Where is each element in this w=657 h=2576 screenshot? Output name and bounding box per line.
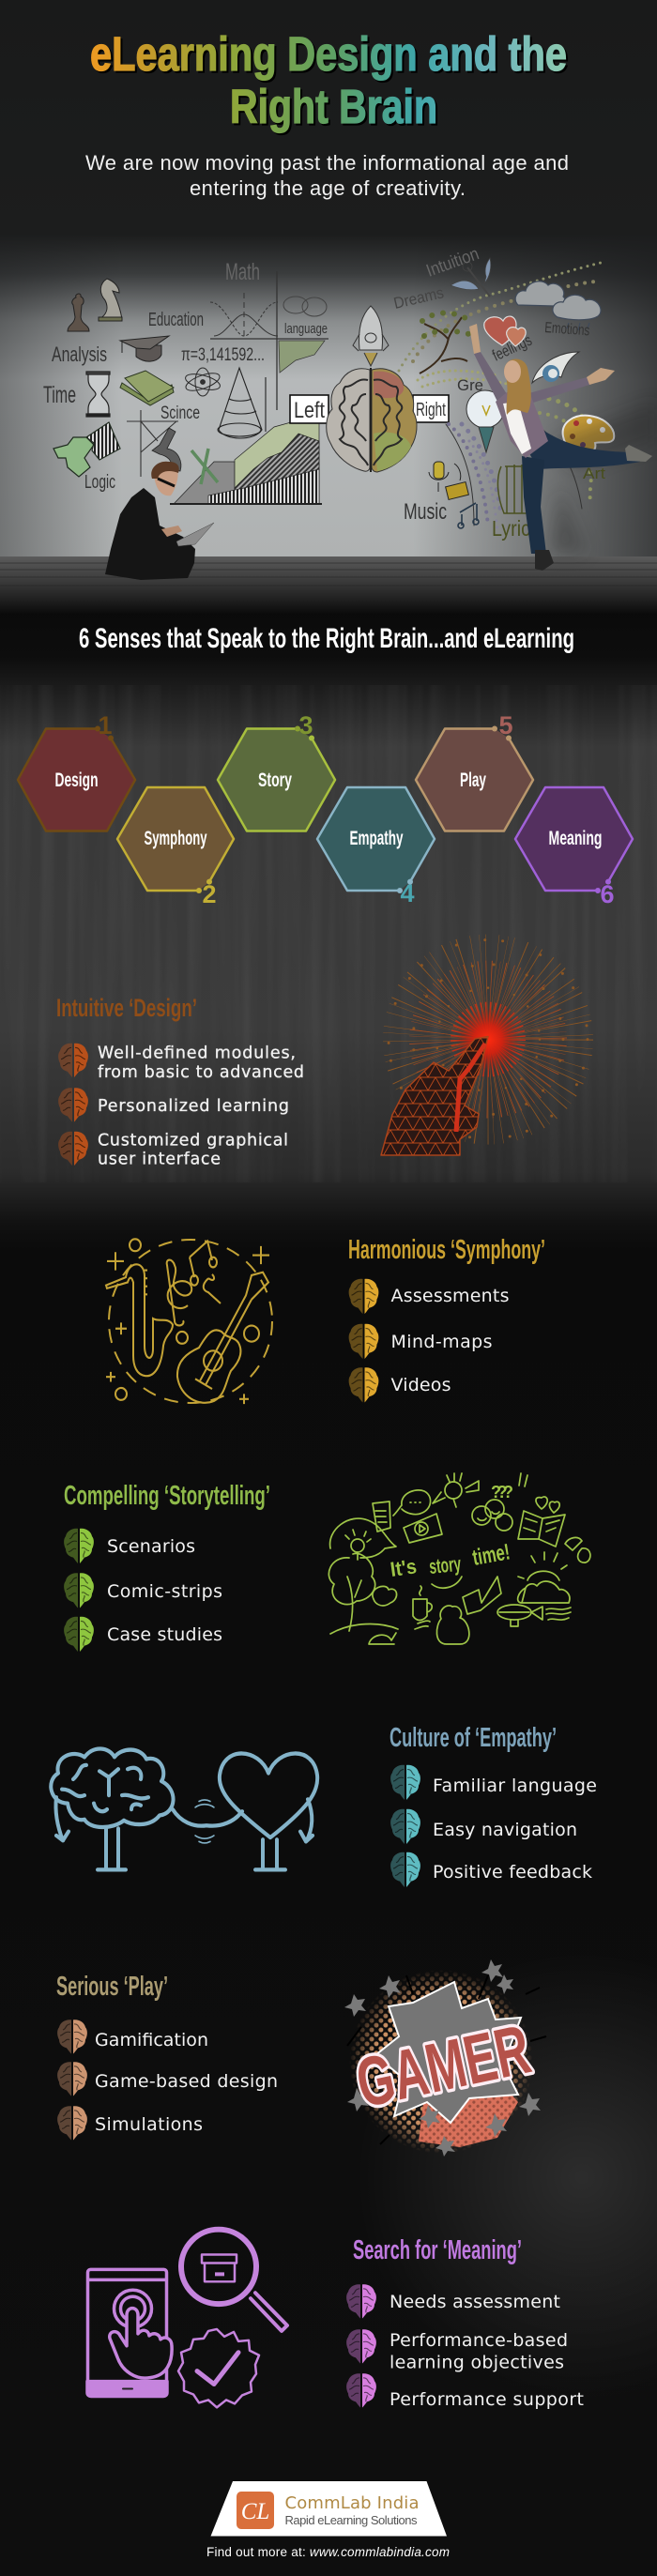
bullet list: Familiar language xyxy=(433,1776,597,1796)
hexagon: meaning: Meaning xyxy=(548,828,603,849)
wall shadow xyxy=(549,402,657,554)
head xyxy=(151,462,179,495)
sketch: labels left: Math xyxy=(225,259,260,285)
bullet list: Game-based design xyxy=(95,2071,278,2092)
bullet list xyxy=(57,2020,278,2140)
sketch: brain xyxy=(327,368,417,472)
sketch: tree xyxy=(420,312,469,373)
sketch: labels left xyxy=(43,259,328,493)
sketch: labels left: language xyxy=(284,321,328,337)
bullet list: Simulations xyxy=(95,2114,203,2135)
sketch: eye xyxy=(532,352,579,383)
heading: Serious ‘Play’ xyxy=(56,1972,168,2002)
sketch: right-side labels: Lyric xyxy=(492,516,530,541)
sketch: right-side labels: Emotions xyxy=(544,320,590,339)
icon: gamer badge xyxy=(344,1959,546,2157)
hexagon: symphony xyxy=(117,787,234,908)
bullet list xyxy=(64,1529,222,1652)
hexagon: meaning xyxy=(515,787,633,908)
man with laptop xyxy=(105,462,214,580)
sketch: geometry and microscope xyxy=(127,410,181,477)
hands xyxy=(469,324,615,385)
panel: search for meaning xyxy=(87,2230,584,2410)
hexagon: meaning: 6 xyxy=(600,880,615,908)
sketch: books xyxy=(120,371,174,405)
sketch: microphone and radio xyxy=(429,462,468,499)
standing leg xyxy=(522,456,546,554)
face xyxy=(504,360,521,383)
heading: Compelling ‘Storytelling’ xyxy=(64,1481,270,1511)
footer logo xyxy=(210,2481,447,2536)
bullet list: Mind-maps xyxy=(390,1332,492,1352)
title: Right Brain xyxy=(230,80,437,133)
heading: Culture of ‘Empathy’ xyxy=(390,1723,557,1753)
sketch: harp xyxy=(497,465,531,513)
hexagon: design xyxy=(18,711,135,831)
bullet list: Gamification xyxy=(95,2030,208,2050)
hexagon: design: Design xyxy=(54,770,98,791)
hair xyxy=(504,359,531,415)
sketch: hourglass xyxy=(86,372,110,417)
hexagon: symphony: 2 xyxy=(202,880,217,908)
panel: culture of empathy xyxy=(51,1723,597,1887)
icon: story time doodles: ??? xyxy=(491,1483,513,1501)
raised leg xyxy=(527,430,640,469)
icon: story time doodles: story xyxy=(428,1552,463,1578)
bullet list xyxy=(58,1044,304,1169)
title xyxy=(90,27,567,133)
bullet list: from basic to advanced xyxy=(98,1063,304,1082)
bullet list: Well-defined modules, xyxy=(98,1044,296,1062)
icon: story time doodles: time! xyxy=(470,1539,512,1571)
sketch: atom xyxy=(184,368,222,396)
lower right glow xyxy=(357,1952,657,2402)
panel: intuitive design xyxy=(56,940,588,1169)
chalkboard texture xyxy=(0,685,657,1182)
sketch: right-side labels: Intuition xyxy=(424,244,481,282)
icon: story time doodles xyxy=(328,1473,590,1644)
sketch: key with wings xyxy=(451,258,491,297)
sketch: language bubbles xyxy=(283,297,327,316)
bullet list: Comic-strips xyxy=(107,1581,222,1602)
brand name: CommLab India xyxy=(285,2493,419,2513)
laptop xyxy=(176,523,214,546)
sketch: area graph xyxy=(170,422,322,504)
woman dancing xyxy=(469,324,657,571)
hexagon: empathy: 4 xyxy=(400,879,415,907)
sketch: right-side labels: feelings xyxy=(490,331,535,365)
sketch: palette xyxy=(563,416,614,452)
hexagon: story xyxy=(218,711,335,831)
tee xyxy=(503,402,531,454)
hexagon: story: 3 xyxy=(298,711,313,739)
footer link: Find out more at: www.commlabindia.com xyxy=(206,2545,450,2559)
bullet list xyxy=(349,1279,509,1402)
bullet list: learning objectives xyxy=(390,2352,564,2372)
bullet list: Performance-based xyxy=(390,2330,568,2351)
sketch: cone xyxy=(218,368,266,438)
icon: story time doodles: It's xyxy=(389,1554,418,1581)
hexagon: story: Story xyxy=(258,770,292,791)
sketch: rocket xyxy=(353,306,389,366)
bullet list: user interface xyxy=(98,1151,221,1169)
hero photo: left and right brain wall xyxy=(0,235,657,615)
sketch: graduation cap xyxy=(120,336,169,361)
icon: musical instruments xyxy=(106,1239,272,1404)
bullet list: Performance support xyxy=(390,2389,584,2410)
subtitle: We are now moving past the informational age and xyxy=(85,151,569,175)
arms xyxy=(474,352,589,404)
sketch: clouds xyxy=(515,282,601,330)
logo mark: CL xyxy=(241,2499,269,2524)
boot xyxy=(535,550,554,571)
hand xyxy=(161,526,182,537)
sketch: labels left: Time xyxy=(43,382,76,408)
icon: tablet, magnifier and badge xyxy=(87,2230,287,2407)
shirt xyxy=(496,392,548,458)
floor xyxy=(0,556,657,615)
sketch: right label: Right xyxy=(416,400,446,420)
sketch: labels left: Analysis xyxy=(52,343,107,366)
bullet list: Scenarios xyxy=(107,1536,195,1557)
bullet list: Videos xyxy=(390,1375,451,1395)
tagline: Rapid eLearning Solutions xyxy=(285,2513,418,2527)
sketch: labels left: Scince xyxy=(160,404,200,423)
heading: Search for ‘Meaning’ xyxy=(353,2235,522,2265)
bullet list: Needs assessment xyxy=(390,2292,560,2312)
hexagon: empathy xyxy=(317,787,435,907)
hexagon: play: Play xyxy=(460,770,486,791)
sketch: math axes xyxy=(210,271,328,410)
man body xyxy=(105,488,195,580)
sketch: puzzle xyxy=(53,422,120,477)
heading: Intuitive ‘Design’ xyxy=(56,994,197,1022)
sketch: light bulb xyxy=(466,390,504,452)
bullet list xyxy=(390,1765,597,1887)
panel: compelling storytelling xyxy=(64,1473,590,1652)
bullet list xyxy=(346,2284,584,2410)
hexagon: design: 1 xyxy=(98,711,113,739)
sketch: small chart xyxy=(279,341,325,373)
hexagon: symphony: Symphony xyxy=(145,828,207,849)
sketch: right-side labels: Art xyxy=(583,465,605,482)
icon: gamer badge: GAMER xyxy=(350,2010,537,2122)
sketch: right-side labels: Music xyxy=(404,499,447,525)
shoe xyxy=(625,445,652,462)
sketch: dotted idea bands xyxy=(399,263,601,530)
bullet list: Case studies xyxy=(107,1624,222,1645)
sketch: chess pieces xyxy=(68,279,122,331)
icon: hand touching light burst xyxy=(381,940,588,1155)
logo mark xyxy=(237,2492,274,2529)
hexagon: empathy: Empathy xyxy=(349,828,404,849)
bullet list: Customized graphical xyxy=(98,1132,288,1151)
bullet list: Easy navigation xyxy=(433,1820,577,1840)
subtitle: entering the age of creativity. xyxy=(190,176,466,200)
bullet list: Personalized learning xyxy=(98,1097,289,1116)
icon: brain and heart shaking hands xyxy=(51,1748,317,1869)
sketch: right label xyxy=(413,395,449,422)
sketch: hearts xyxy=(484,316,526,346)
panel: harmonious symphony xyxy=(106,1235,545,1404)
panel: serious play xyxy=(56,1959,546,2157)
sketch: labels left: π=3,141592... xyxy=(181,345,265,365)
bullet list: Assessments xyxy=(390,1286,509,1306)
bullet list: Positive feedback xyxy=(433,1862,592,1882)
hexagon: play: 5 xyxy=(498,711,513,739)
sketch: music notes xyxy=(458,503,479,528)
hexagon: play xyxy=(416,711,533,831)
sketch: labels left: Logic xyxy=(84,472,115,493)
sketch: right-side labels: Dreams xyxy=(392,283,446,312)
sketch: right-side labels: Gre xyxy=(457,376,483,394)
subtitle xyxy=(85,151,569,200)
sketch: left label: Left xyxy=(294,398,325,423)
sketch: labels left: Education xyxy=(148,310,204,330)
sketch: right-side labels xyxy=(392,244,605,541)
wall xyxy=(0,235,657,558)
